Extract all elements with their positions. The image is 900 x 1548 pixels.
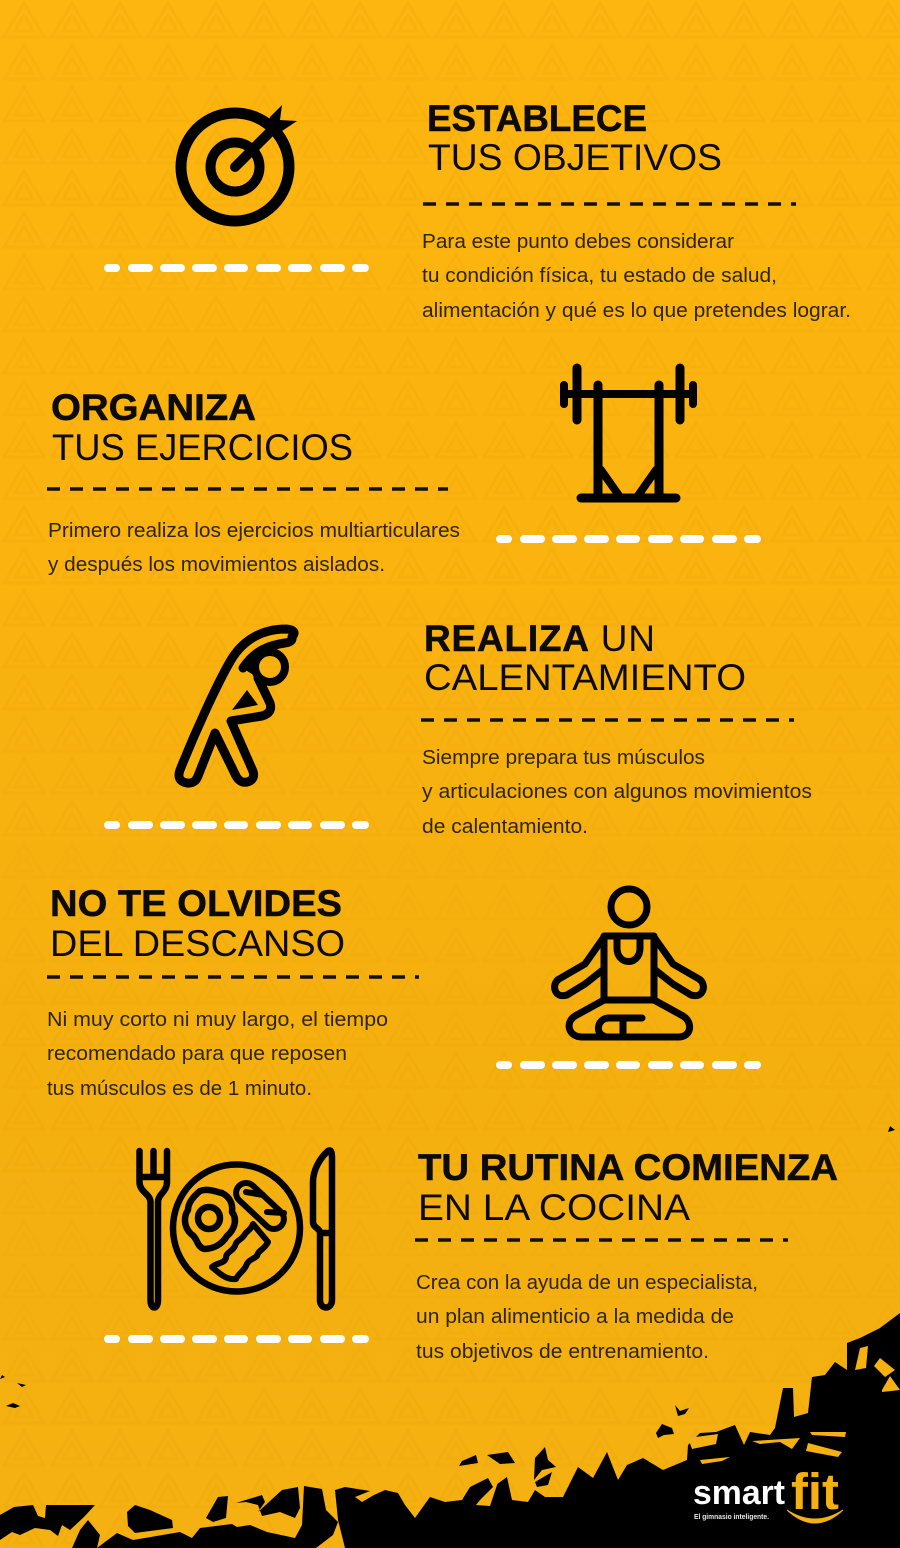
icon: barbell rack (564, 368, 693, 498)
text block: Ni muy corto ni muy largo, el tiempo (47, 1009, 388, 1031)
text block: un plan alimenticio a la medida de (416, 1306, 734, 1328)
logo: smart fit: fit (791, 1463, 839, 1520)
text block: tus músculos es de 1 minuto. (47, 1078, 312, 1100)
text block (416, 1272, 758, 1363)
panel: tu rutina comienza en la cocina (108, 1147, 838, 1363)
panel: realiza un calentamiento (108, 618, 812, 838)
icon: target (181, 105, 297, 221)
text block: tu condición física, tu estado de salud, (422, 265, 777, 287)
icon: meditating person (555, 889, 703, 1037)
heading (50, 883, 345, 964)
text block: Primero realiza los ejercicios multiarticulares (48, 520, 460, 542)
heading (51, 387, 353, 468)
heading: NO TE OLVIDES (50, 883, 342, 924)
heading: TUS EJERCICIOS (52, 427, 353, 468)
text block: Para este punto debes considerar (422, 231, 734, 253)
white dashed divider (108, 821, 365, 829)
white dashed divider (108, 1335, 365, 1343)
heading: ESTABLECE (427, 98, 647, 139)
text block (48, 520, 460, 576)
heading: EN LA COCINA (418, 1187, 690, 1228)
text block: y después los movimientos aislados. (48, 554, 385, 576)
heading (418, 1147, 838, 1228)
text block (422, 747, 812, 838)
white dashed divider (500, 1061, 757, 1069)
yellow flecks in torn edge (476, 1346, 900, 1506)
icon: stretching person (179, 629, 294, 783)
heading: TU RUTINA COMIENZA (418, 1147, 838, 1188)
text block: Siempre prepara tus músculos (422, 747, 705, 769)
white dashed divider (500, 535, 757, 543)
text block: y articulaciones con algunos movimientos (422, 781, 812, 803)
heading: DEL DESCANSO (50, 923, 345, 964)
heading (427, 98, 722, 178)
text block: recomendado para que reposen (47, 1043, 347, 1065)
text block: de calentamiento. (422, 816, 588, 838)
heading (424, 618, 746, 698)
white dashed divider (108, 264, 365, 272)
text block (422, 231, 851, 322)
heading: ORGANIZA (51, 387, 256, 428)
icon: plate with cutlery (140, 1150, 332, 1308)
heading: CALENTAMIENTO (424, 657, 746, 698)
logo: smart fit: smart (693, 1474, 785, 1512)
panel: establece tus objetivos (108, 98, 851, 322)
logo: smart fit: El gimnasio inteligente. (694, 1514, 769, 1521)
text block: tus objetivos de entrenamiento. (416, 1341, 709, 1363)
torn black edge (0, 1126, 900, 1548)
text block: Crea con la ayuda de un especialista, (416, 1272, 758, 1294)
heading: TUS OBJETIVOS (428, 137, 722, 178)
heading: REALIZA UN (424, 618, 655, 659)
logo: smart fit (693, 1463, 843, 1523)
panel: organiza tus ejercicios (47, 368, 757, 576)
text block: alimentación y qué es lo que pretendes lograr. (422, 300, 851, 322)
panel: no te olvides del descanso (47, 883, 757, 1100)
text block (47, 1009, 388, 1100)
